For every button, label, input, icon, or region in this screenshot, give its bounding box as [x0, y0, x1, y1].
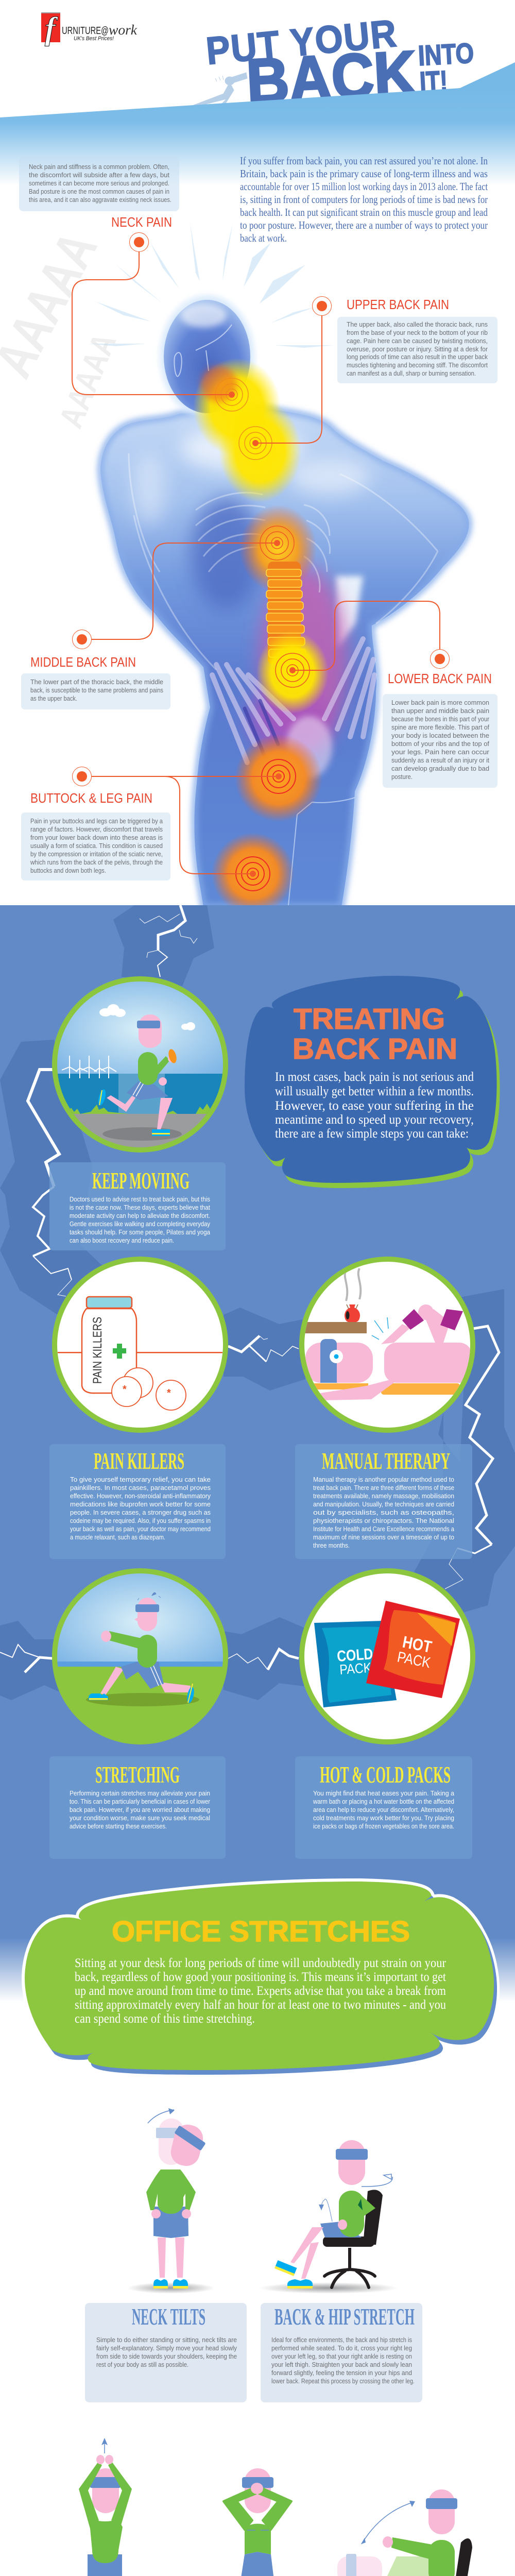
spine [266, 562, 306, 665]
panel: lower back pain: than upper and middle back pain [391, 707, 489, 715]
panel: middle back pain: The lower part of the thoracic back, the middle [30, 678, 163, 686]
heading blob: office stretches [25, 1882, 497, 2075]
panel: middle back pain: as the upper back. [30, 694, 77, 702]
panel: hot and cold packs: warm bath or placing a hot water bottle on the affected [313, 1798, 454, 1805]
panel: middle back pain: back, is susceptible to the same problems and pains [30, 686, 163, 694]
panel: pain killers: your back as well as pain, your doctor may recommend [70, 1525, 211, 1533]
heading: lower back pain: LOWER BACK PAIN [388, 671, 492, 686]
panel: hot and cold packs: ice packs or bags of frozen vegetables on the sore area. [313, 1822, 454, 1830]
icon: hot pack: HOT [401, 1633, 434, 1656]
panel: back and hip stretch: over your left leg, so that your right ankle is resting on [271, 2352, 412, 2360]
panel: neck tilts [85, 2303, 247, 2402]
title: BACK [245, 38, 418, 117]
circle: keep moving runner [52, 974, 232, 1155]
icon: cold pack: COLD [336, 1646, 373, 1665]
panel: lower back pain: spine are more flexible. This part of [391, 723, 489, 731]
panel: pain killers: PAIN KILLERS [94, 1448, 184, 1474]
panel: neck pain: the discomfort will subside after a few days, but [29, 171, 169, 179]
panel: back and hip stretch: Ideal for office environments, the back and hip stretch is [271, 2336, 412, 2344]
panel: lower back pain: your body is located between the [391, 732, 489, 739]
panel: pain killers: a muscle relaxant, such as diazepam. [70, 1533, 165, 1541]
title [204, 11, 474, 117]
panel: upper back pain [337, 317, 497, 383]
panel: buttock and leg pain: which runs from the back of the pelvis, through the [30, 858, 163, 866]
panel: lower back pain: suddenly as a result of an injury or it [391, 756, 489, 764]
panel: manual therapy: physiotherapists or chiropractors. The National [313, 1517, 454, 1524]
panel: keep moving [49, 1162, 226, 1250]
logo: UK's Best Prices! [74, 36, 114, 42]
office stretches text: back, regardless of how good your positioning is. This means it’s important to get [75, 1970, 446, 1984]
heading blob: treating back pain [245, 976, 500, 1188]
panel: manual therapy: treat back pain. There are three different forms of these [313, 1484, 454, 1492]
heading: office stretches: OFFICE STRETCHES [112, 1915, 410, 1948]
panel: manual therapy: out by specialists, such as osteopaths, [313, 1509, 454, 1516]
panel: back and hip stretch: lower back. Repeat this process by crossing the other leg. [271, 2377, 415, 2385]
heading: treating back pain: TREATING [294, 1003, 445, 1036]
icon: hot pack: PACK [396, 1649, 432, 1671]
panel: manual therapy [295, 1444, 472, 1559]
panel: stretching: advice before starting these exercises. [70, 1822, 167, 1830]
panel: neck pain: sometimes it can become more serious and prolonged. [29, 179, 169, 187]
panel: manual therapy: Manual therapy is another popular method used to [313, 1476, 454, 1483]
panel: back and hip stretch: performed while seated. To do it, cross your right leg [271, 2344, 412, 2352]
treating intro text: meantime and to speed up your recovery, [275, 1113, 474, 1127]
circle: pain killers: * [123, 1384, 127, 1395]
title: PUT YOUR [204, 11, 399, 73]
icon: cold pack: PACK [339, 1660, 372, 1677]
ribs and arm bones [129, 453, 438, 670]
panel: buttock and leg pain [21, 812, 170, 880]
panel: neck pain: Bad posture is one the most common causes of pain in [29, 188, 169, 195]
heading: buttock and leg pain: BUTTOCK & LEG PAIN [30, 790, 152, 806]
panel: neck tilts: from side to side towards your shoulders, keeping the [96, 2352, 237, 2360]
heading: treating back pain [293, 1003, 457, 1065]
decorative pain text AAAAA: AAAAA [52, 328, 123, 433]
blue section background [0, 905, 515, 2003]
decorative pain text AAAAA [0, 222, 123, 433]
panel: middle back pain [21, 673, 170, 709]
panel: upper back pain: overuse, poor posture or injury. Sitting at a desk for [347, 345, 488, 353]
figure: upper back stretch [214, 2468, 301, 2576]
office stretches text: can spend some of this time stretching. [75, 2012, 255, 2026]
panel: stretching: STRETCHING [95, 1762, 180, 1788]
panel: back and hip stretch: forward slightly, feeling the tension in your hips and [271, 2369, 412, 2377]
office stretches text [75, 1956, 447, 2026]
circle: stretching [52, 1566, 232, 1749]
figure: neck tilts [127, 2108, 215, 2294]
panel: lower back pain [383, 694, 497, 788]
panel: manual therapy: maximum of nine sessions over a timescale of up to [313, 1533, 454, 1541]
heading: neck pain: NECK PAIN [111, 214, 172, 230]
heading: treating back pain: BACK PAIN [293, 1032, 457, 1065]
panel: upper back pain: from the base of your neck to the bottom of your rib [347, 329, 488, 336]
icon: hot pack [366, 1601, 460, 1698]
panel: pain killers: effective. However, non-steroidal anti-inflammatory [70, 1492, 211, 1500]
panel: buttock and leg pain: by the compression or irritation of the sciatic nerve, [30, 850, 163, 858]
panel: neck tilts: fairly self-explanatory. Simply move your head slowly [96, 2344, 237, 2352]
zigzag dark bands [0, 905, 515, 1700]
intro text: back at work. [240, 232, 287, 244]
panel: pain killers: medications like ibuprofen work better for some [70, 1500, 211, 1508]
panel: buttock and leg pain: usually a form of sciatica. This condition is caused [30, 842, 163, 850]
panel: neck pain [19, 156, 179, 211]
panel: neck tilts: rest of your body as still as possible. [96, 2361, 188, 2368]
icon: wind turbines [62, 1056, 116, 1078]
panel: lower back pain: posture. [391, 773, 413, 781]
panel: neck tilts: NECK TILTS [132, 2304, 205, 2330]
title: IT! [419, 64, 449, 99]
heading: middle back pain: MIDDLE BACK PAIN [30, 654, 136, 670]
panel: upper back pain: can manifest as a dull, sharp or burning sensation. [347, 369, 476, 377]
panel: pain killers: To give yourself temporary relief, you can take [70, 1476, 211, 1483]
panel: hot and cold packs: cold treatments may work better for you. Try placing [313, 1814, 454, 1822]
circle: hot and cold packs [299, 1568, 475, 1744]
figure: back and hip stretch [259, 2140, 398, 2294]
intro text [240, 155, 488, 244]
panel: stretching: your condition worse, make sure you seek medical [70, 1814, 210, 1822]
panel: keep moving: Gentle exercises like walking and completing everyday [70, 1220, 210, 1228]
panel: hot and cold packs [295, 1756, 472, 1859]
panel: pain killers: codeine may be required. Also, if you suffer spasms in [70, 1517, 211, 1524]
panel: neck pain: Neck pain and stiffness is a common problem. Often, [29, 163, 169, 171]
treating intro text: will usually get better within a few months. [275, 1084, 474, 1098]
panel: hot and cold packs: You might find that heat eases your pain. Taking a [313, 1789, 455, 1797]
panel: buttock and leg pain: Pain in your buttocks and legs can be triggered by a [30, 817, 163, 825]
panel: lower back pain: because the bones in this part of your [391, 715, 490, 723]
office stretches text: sitting approximately every half an hour for at least one to two minutes - and you [75, 1998, 446, 2012]
lightning bolts [0, 905, 499, 1672]
panel: buttock and leg pain: range of factors. However, discomfort that travels [30, 825, 163, 833]
logo: work [109, 22, 138, 38]
panel: lower back pain: Lower back pain is more common [391, 699, 489, 706]
figure: back stretch [337, 2489, 479, 2576]
icon: cold pack [314, 1621, 397, 1707]
panel: stretching: back pain. However, if you are worried about making [70, 1806, 210, 1814]
panel: keep moving: is not the case now. These days, experts believe that [70, 1204, 210, 1211]
panel: upper back pain: The upper back, also called the thoracic back, runs [347, 320, 488, 328]
hill background [0, 62, 515, 187]
office stretches text: up and move around from time to time. Experts advise that you take a break from [75, 1984, 446, 1998]
panel: back and hip stretch: your left thigh. Straighten your back and slowly lean [271, 2361, 412, 2368]
figure: upper body stretch [61, 2438, 149, 2576]
logo: f [45, 11, 58, 46]
panel: back and hip stretch [261, 2303, 422, 2402]
panel: manual therapy: treatments available, namely massage, mobilisation [313, 1492, 454, 1500]
circle: pain killers: * [167, 1387, 171, 1399]
panel: lower back pain: your legs. Pain here can occur [391, 748, 490, 756]
hands [212, 639, 374, 762]
panel: manual therapy: Institute for Health and Care Excellence recommends a [313, 1525, 455, 1533]
title: INTO [417, 37, 474, 72]
panel: buttock and leg pain: from your lower back down into these areas is [30, 834, 163, 841]
treating intro text: there are a few simple steps you can take: [275, 1127, 469, 1141]
panel: pain killers: painkillers. In most cases, paracetamol proves [70, 1484, 211, 1492]
icon: climber pushing the title [194, 73, 247, 105]
panel: hot and cold packs: area can help to reduce your discomfort. Alternatively, [313, 1806, 454, 1814]
runner stretching [89, 1592, 195, 1704]
panel: keep moving: KEEP MOVIING [92, 1168, 190, 1194]
callout dots [72, 233, 449, 877]
panel: upper back pain: cage. Pain here can be caused by twisting motions, [347, 337, 488, 345]
circle: pain killers [52, 1257, 228, 1433]
panel: stretching: too. This can be particularly beneficial in cases of lower [70, 1798, 211, 1805]
panel: pain killers: people. In severe cases, a stronger drug such as [70, 1509, 211, 1516]
panel: buttock and leg pain: buttocks and down both legs. [30, 867, 106, 874]
panel: lower back pain: can develop gradually due to bad [391, 765, 489, 772]
pain glow spots [193, 358, 329, 915]
panel: keep moving: can also boost recovery and reduce pain. [70, 1236, 174, 1244]
office stretches text: Sitting at your desk for long periods of time will undoubtedly put strain on your [75, 1956, 447, 1970]
panel: stretching [49, 1756, 226, 1859]
treating intro text: In most cases, back pain is not serious and [275, 1070, 474, 1084]
treating intro text: However, to ease your suffering in the [275, 1099, 474, 1113]
panel: lower back pain: bottom of your ribs and the top of [391, 740, 489, 748]
panel: pain killers [49, 1444, 226, 1559]
panel: neck tilts: Simple to do either standing or sitting, neck tilts are [96, 2336, 237, 2344]
runner [97, 1014, 178, 1136]
panel: keep moving: tasks should help. For some people, Pilates and yoga [70, 1228, 211, 1236]
panel: manual therapy: three months. [313, 1541, 350, 1549]
panel: keep moving: moderate activity can help to alleviate the discomfort. [70, 1212, 210, 1219]
icon: rays around head [88, 223, 334, 348]
circle: manual therapy [299, 1257, 475, 1433]
circle: pain killers: PAIN KILLERS [91, 1317, 105, 1384]
panel: upper back pain: long periods of time can also result in the upper back [347, 353, 488, 361]
panel: keep moving: Doctors used to advise rest to treat back pain, but this [70, 1195, 210, 1203]
logo [41, 11, 138, 46]
logo: URNITURE@ [62, 25, 109, 37]
treating intro text [275, 1070, 474, 1141]
heading: upper back pain: UPPER BACK PAIN [347, 297, 449, 312]
panel: stretching: Performing certain stretches may alleviate your pain [70, 1789, 210, 1797]
anatomy figure [100, 296, 469, 907]
panel: manual therapy: and manipulation. Usually, the techniques are carried [313, 1500, 454, 1508]
panel: upper back pain: muscles tightening and becoming stiff. The discomfort [347, 361, 488, 369]
panel: neck pain: this area, and it can also aggravate existing neck issues. [29, 196, 171, 204]
callout connector lines [72, 251, 440, 874]
